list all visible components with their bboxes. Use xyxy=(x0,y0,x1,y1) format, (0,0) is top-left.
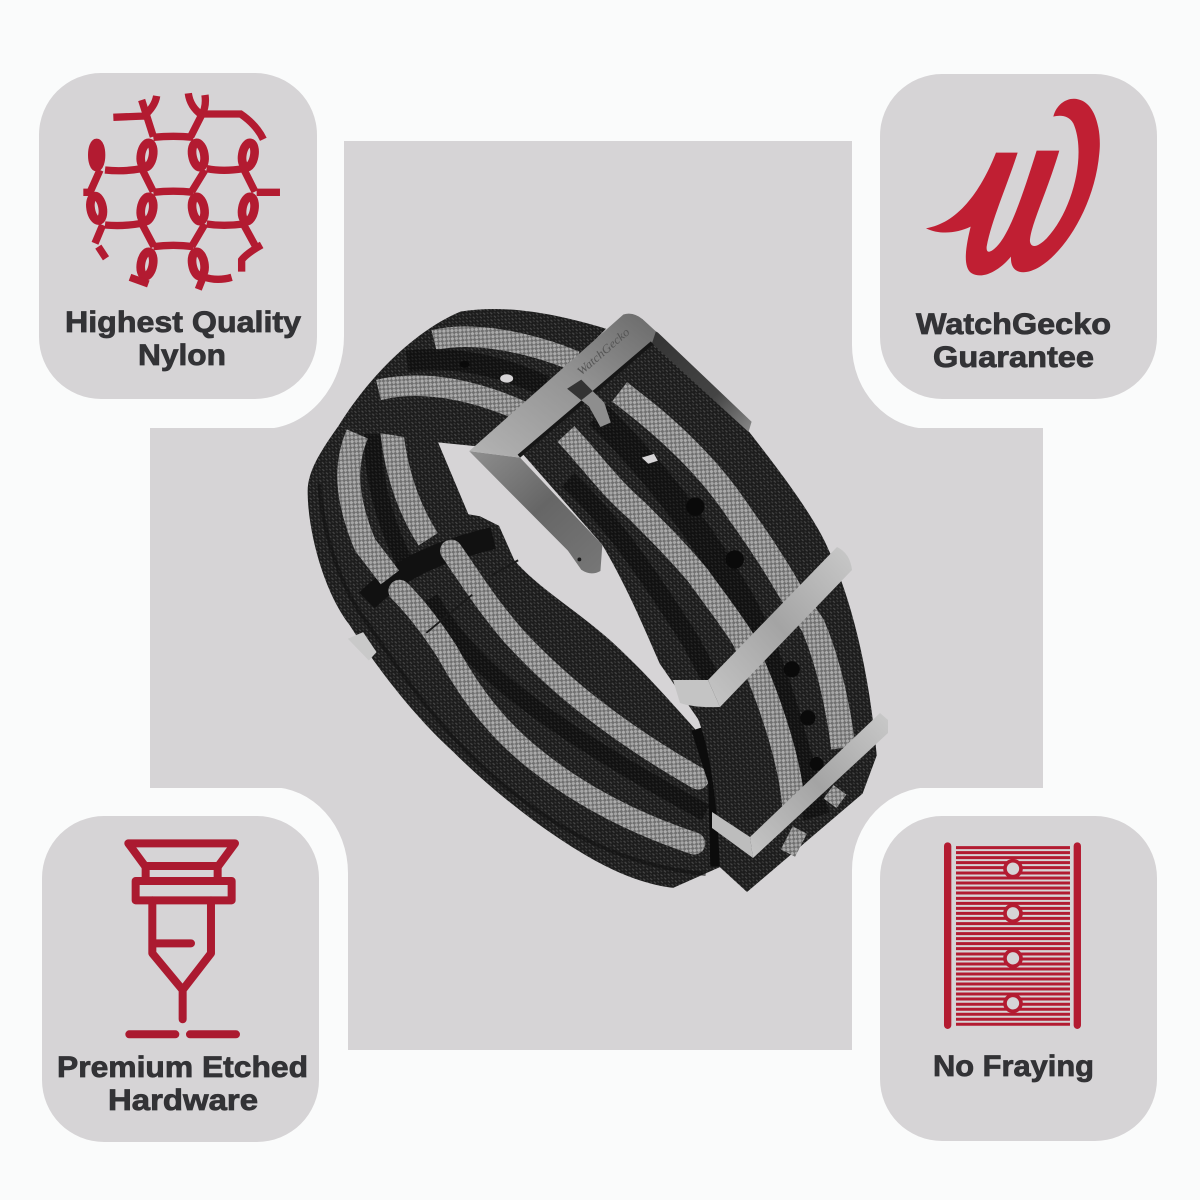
front strap band xyxy=(522,342,877,892)
buckle xyxy=(469,314,752,573)
second keeper loop xyxy=(712,713,888,858)
watch strap photo xyxy=(308,309,877,892)
panel: no fraying xyxy=(880,816,1157,1141)
heading: Premium Etched xyxy=(57,1051,308,1084)
first keeper loop xyxy=(673,547,852,707)
buckle engraving: WatchGecko xyxy=(574,325,632,378)
buckle tang xyxy=(567,380,611,427)
tang top xyxy=(567,380,593,400)
holes xyxy=(1005,861,1021,1011)
icon: W logo xyxy=(926,99,1100,275)
woven lines xyxy=(956,848,1070,1024)
central grey cross panel xyxy=(150,141,1043,1050)
icon: strap edge xyxy=(948,846,1077,1025)
panel: highest quality nylon xyxy=(39,73,317,399)
strap holes xyxy=(460,361,824,771)
icon: nylon mesh xyxy=(83,93,280,289)
buckle right arm xyxy=(625,315,752,432)
icon: laser etcher xyxy=(128,843,236,1034)
heading second line: Nylon xyxy=(138,339,226,372)
heading: No Fraying xyxy=(933,1050,1094,1083)
small rear keeper xyxy=(348,632,377,661)
strap side edges xyxy=(948,846,1077,1025)
buckle bar xyxy=(469,314,656,458)
buckle left arm xyxy=(469,451,602,573)
panel: premium etched hardware xyxy=(42,816,319,1142)
lower and left strap band xyxy=(308,426,720,888)
heading: Highest Quality xyxy=(65,306,301,339)
buckle inner edge xyxy=(519,343,652,456)
buckle pin hole xyxy=(577,558,581,561)
heading second line: Hardware xyxy=(108,1084,258,1117)
heading: WatchGecko xyxy=(916,308,1111,341)
panel: watchgecko guarantee xyxy=(880,74,1157,399)
upper strap band xyxy=(338,309,606,447)
heading second line: Guarantee xyxy=(933,341,1094,374)
